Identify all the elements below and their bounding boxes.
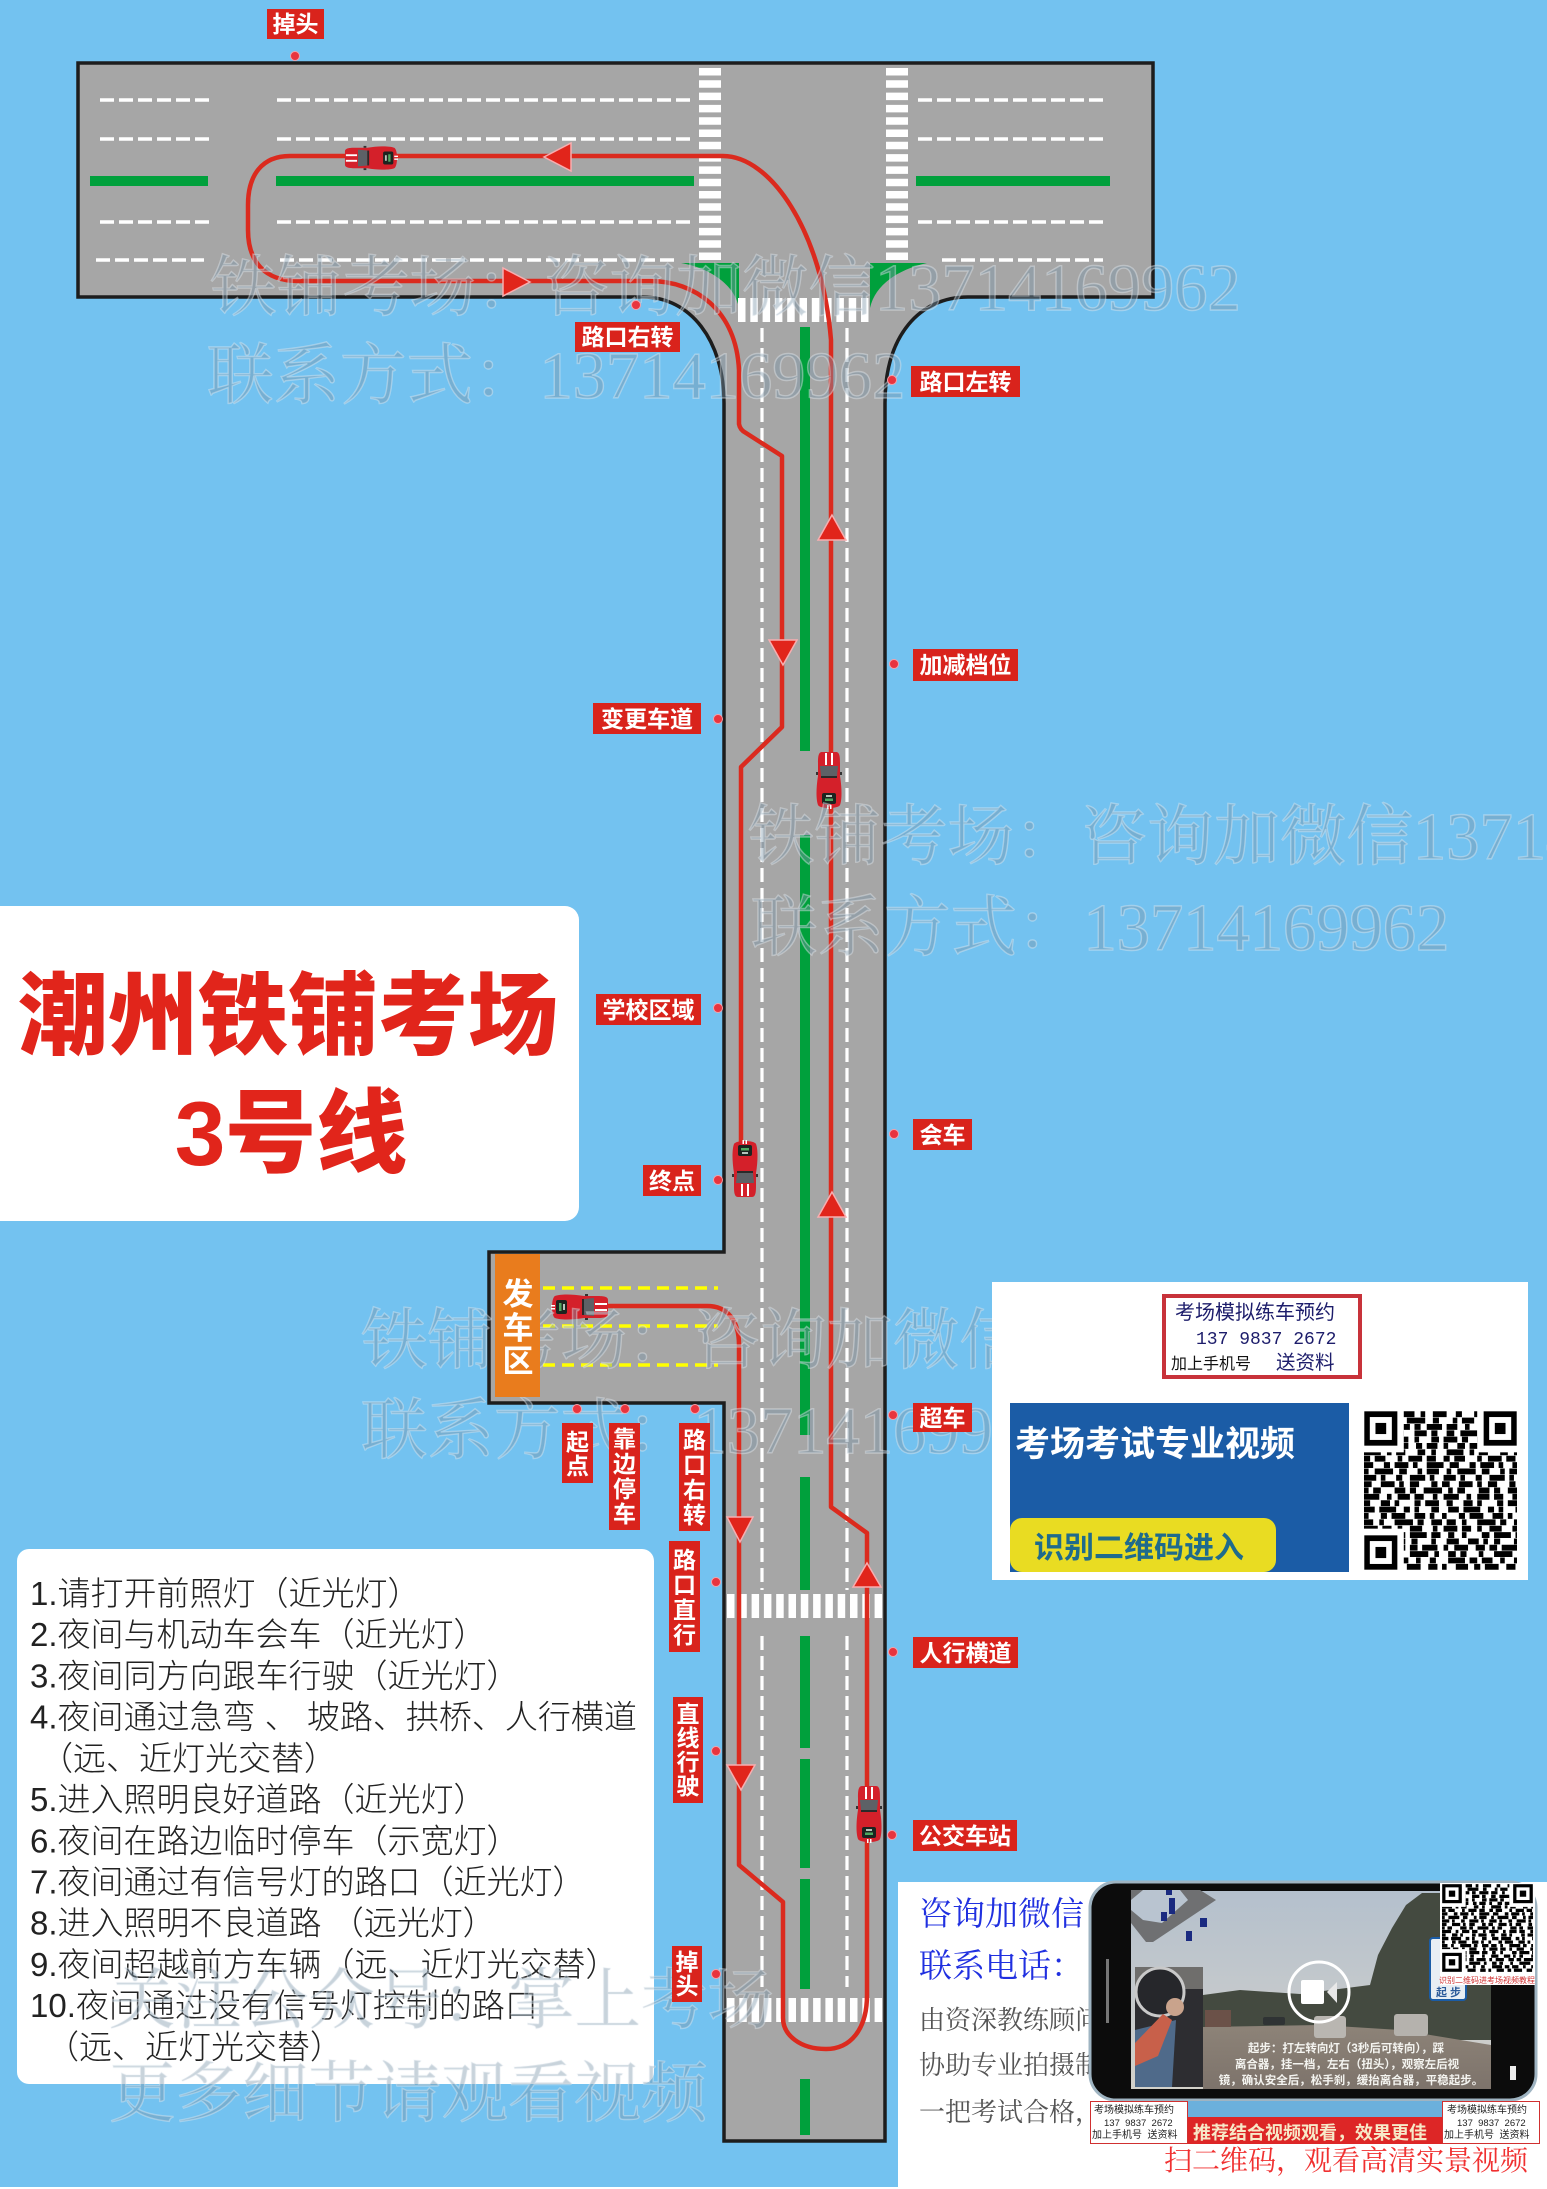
label: 掉头 top: [267, 9, 324, 60]
contact panel: 咨询加微信: [919, 1896, 1084, 1933]
contact panel: [898, 1882, 1547, 2189]
title text: 潮州铁铺考场: [18, 967, 558, 1067]
ad panel: video QR: [992, 1282, 1528, 1580]
road network: [78, 63, 1153, 2141]
car: U-turn section: [345, 146, 398, 170]
label: 会车: 会车: [920, 1122, 966, 1148]
booking box: 137 9837 2672: [1196, 1330, 1336, 1350]
booking box: 加上手机号: [1171, 1355, 1251, 1373]
label: 超车: [888, 1403, 972, 1432]
instructions panel: （远、近灯光交替）: [40, 1740, 337, 1777]
label: 公交车站: [888, 1820, 1017, 1851]
label: 学校区域: 学校区域: [602, 997, 694, 1023]
bottom promo bar: [1090, 2101, 1540, 2144]
instructions panel: （远、近灯光交替）: [46, 2028, 343, 2066]
small booking card right: 加上手机号 送资料: [1444, 2128, 1530, 2141]
blue video banner: 考场考试专业视频: [1015, 1425, 1295, 1464]
bottom promo bar: 推荐结合视频观看，效果更佳: [1193, 2122, 1427, 2143]
watermarks: 联系方式：13714169962: [361, 1395, 1059, 1468]
label: 直线行驶: [673, 1697, 720, 1803]
driver inset: [1135, 1967, 1203, 2087]
instructions panel: 1.请打开前照灯（近光灯）: [30, 1575, 421, 1612]
booking box: 送资料: [1276, 1352, 1335, 1374]
contact panel: 由资深教练顾问: [919, 2006, 1101, 2035]
instructions panel: 8.进入照明不良道路 （远光灯）: [30, 1905, 496, 1942]
label: 路口右转 top: 路口右转: [582, 324, 674, 350]
video subtitles: 离合器，挂一档，左右（扭头），观察左后视: [1235, 2057, 1460, 2071]
watermarks: 联系方式：13714169962: [751, 892, 1449, 965]
title panel: [0, 906, 579, 1221]
side sign card: 起 步: [1436, 1985, 1461, 1999]
contact panel: 协助专业拍摄制: [919, 2051, 1101, 2080]
booking box: 考场模拟练车预约: [1175, 1301, 1335, 1324]
small booking card right: 137 9837 2672: [1457, 2118, 1526, 2129]
title text: [18, 967, 558, 1185]
label: 直线行驶: 直线行驶: [676, 1701, 700, 1799]
start area 发车区: 发车区: [502, 1277, 534, 1379]
play icon: [1289, 1962, 1349, 2022]
watermarks: [109, 252, 1547, 2131]
instructions panel: 4.夜间通过急弯 、 坡路、拱桥、人行横道: [30, 1699, 637, 1736]
video subtitles: 镜，确认安全后，松手刹，缓抬离合器，平稳起步。: [1219, 2073, 1483, 2087]
instructions panel: 5.进入照明良好道路（近光灯）: [30, 1781, 487, 1818]
label: 变更车道: [593, 703, 722, 734]
video subtitles: [1219, 2041, 1483, 2087]
blue video banner: 识别二维码进入: [1034, 1532, 1244, 1565]
small booking card left: [1090, 2102, 1188, 2144]
watermarks: 联系方式：13714169962: [207, 340, 905, 413]
car: gear change section: [816, 752, 842, 809]
watermarks: 铁铺考场：咨询加微信13714169962: [210, 252, 1241, 325]
contact panel: 一把考试合格，: [919, 2098, 1101, 2127]
label: 公交车站: 公交车站: [919, 1823, 1011, 1849]
volume icon: [1510, 2066, 1516, 2080]
side sign card: [1430, 1938, 1466, 2000]
contact panel: 联系电话：: [919, 1948, 1084, 1985]
label: 起点: [562, 1404, 593, 1483]
watermarks: 更多细节请观看视频: [109, 2058, 709, 2131]
video scene: [1131, 1890, 1491, 2089]
label: 加减档位: [890, 649, 1018, 681]
instructions panel: 3.夜间同方向跟车行驶（近光灯）: [30, 1658, 520, 1694]
label: 会车: [890, 1119, 972, 1150]
start area 发车区: [495, 1254, 540, 1397]
small booking card left: 137 9837 2672: [1104, 2118, 1173, 2129]
small booking card right: [1442, 2102, 1540, 2144]
instructions panel: 9.夜间超越前方车辆（远、近灯光交替）: [30, 1946, 619, 1983]
label: 学校区域: [596, 994, 722, 1025]
phone QR code: 识别二维码进考场视频教程: [1439, 1975, 1535, 1985]
watermarks: 关注公众号：掌上考场: [109, 1965, 774, 2038]
small booking card left: 加上手机号 送资料: [1092, 2128, 1178, 2141]
route arrows: [503, 143, 881, 1790]
watermarks: 铁铺考场：咨询加微信13714169962: [361, 1305, 1392, 1378]
label: 加减档位: 加减档位: [920, 652, 1012, 678]
label: 人行横道: 人行横道: [920, 1640, 1012, 1666]
car: start point: [551, 1294, 608, 1320]
label: 终点: [643, 1165, 722, 1196]
label: 路口直行: 路口直行: [673, 1547, 696, 1648]
blue video banner: [1010, 1403, 1349, 1572]
label: 路口左转: [888, 366, 1020, 397]
scan caption: 扫二维码，观看高清实景视频: [1164, 2145, 1529, 2177]
title text: 3号线: [175, 1084, 407, 1185]
speaker bar: [1106, 1959, 1109, 2023]
phone QR code: [1439, 1883, 1535, 1985]
car: end point: [732, 1140, 758, 1197]
instructions panel: 10.夜间通过没有信号灯控制的路口: [30, 1987, 538, 2024]
label: 靠边停车: 靠边停车: [613, 1426, 636, 1527]
phone video mockup: [1090, 1882, 1536, 2100]
instructions panel: 6.夜间在路边临时停车（示宽灯）: [30, 1822, 520, 1859]
label: 掉头 bottom: 掉头: [676, 1949, 698, 1999]
instructions panel: 7.夜间通过有信号灯的路口（近光灯）: [30, 1864, 586, 1900]
label: 变更车道: 变更车道: [601, 706, 693, 732]
label: 人行横道: [888, 1637, 1018, 1668]
label: 掉头 top: 掉头: [272, 11, 318, 37]
video subtitles: 起步：打左转向灯（3秒后可转向），踩: [1248, 2041, 1445, 2055]
instructions panel: 2.夜间与机动车会车（近光灯）: [30, 1616, 487, 1653]
label: 路口左转: 路口左转: [920, 369, 1012, 395]
small booking card right: 考场模拟练车预约: [1447, 2103, 1527, 2116]
route line: [248, 156, 867, 2049]
label: 掉头 bottom: [672, 1946, 720, 2002]
label: 起点: 起点: [566, 1429, 589, 1479]
QR code: [1349, 1405, 1523, 1572]
car: bus stop: [856, 1786, 882, 1843]
booking box: [1164, 1296, 1360, 1377]
label: 路口右转 vertical: [679, 1404, 710, 1531]
mini map: [1131, 1890, 1216, 1942]
label: 靠边停车: [609, 1404, 640, 1530]
label: 路口右转 top: [575, 300, 680, 352]
label: 路口右转 vertical: 路口右转: [683, 1427, 706, 1528]
label: 路口直行: [669, 1541, 720, 1652]
instructions panel: [17, 1549, 654, 2084]
label: 超车: 超车: [920, 1405, 966, 1431]
label: 终点: 终点: [649, 1168, 695, 1194]
small booking card left: 考场模拟练车预约: [1094, 2103, 1174, 2116]
